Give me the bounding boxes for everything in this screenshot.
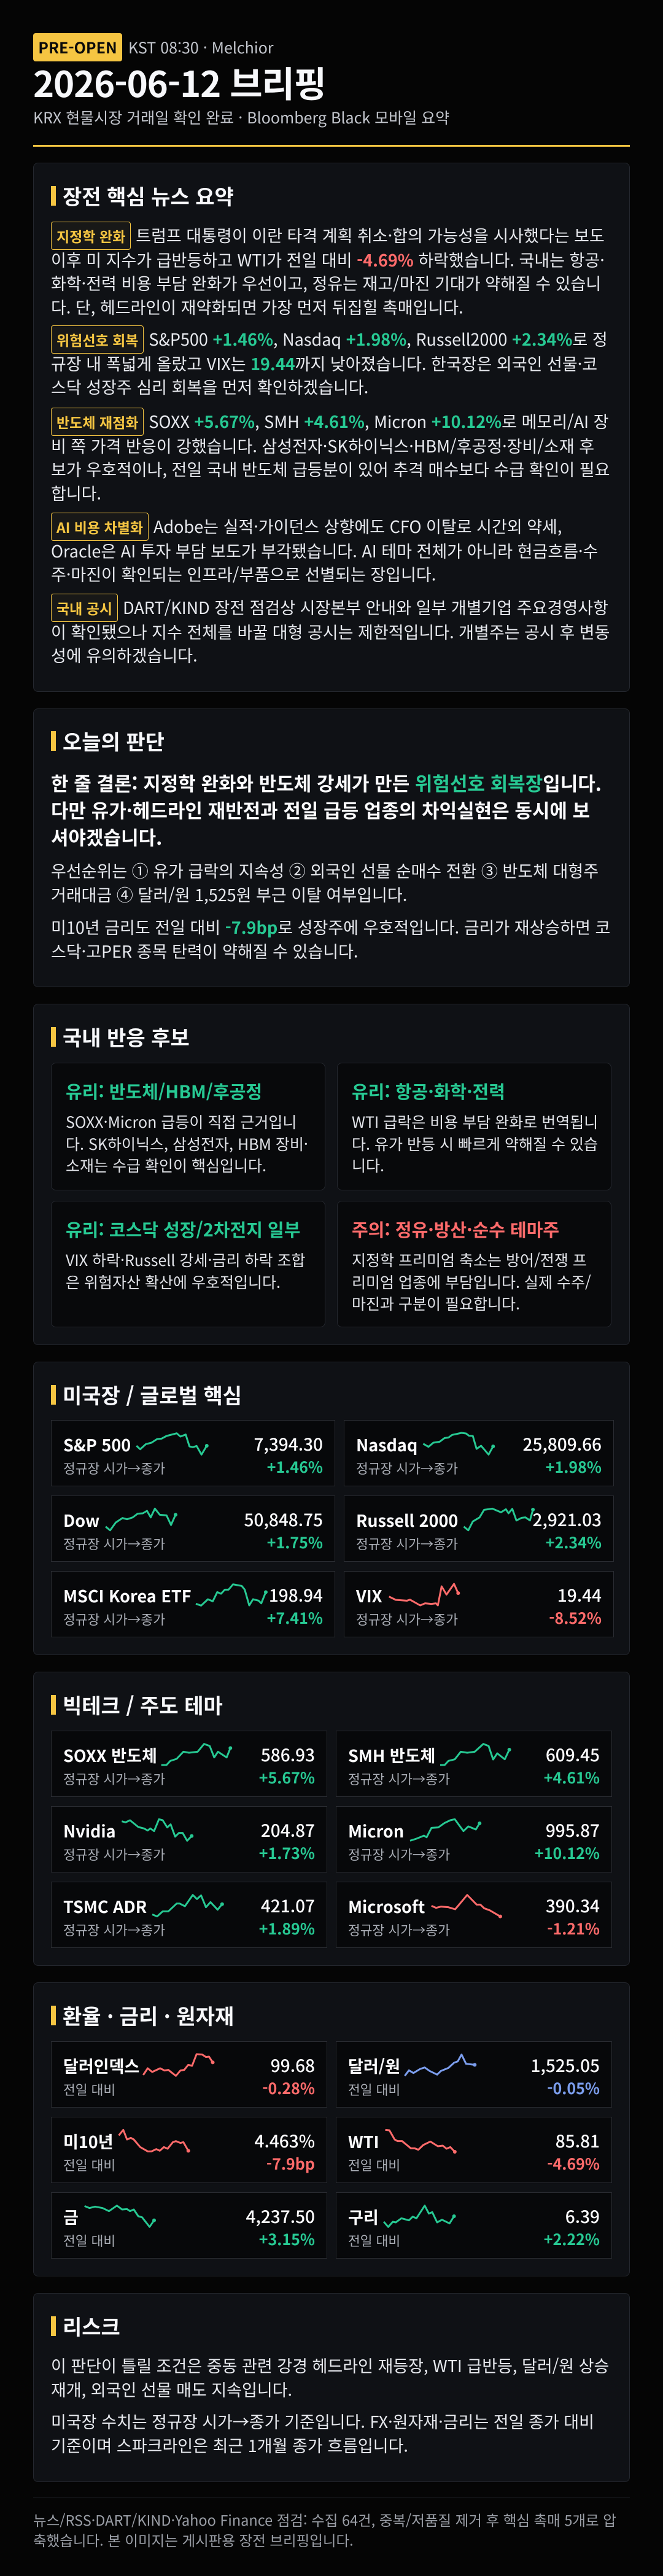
footer note [33, 2509, 616, 2550]
card: VIX: 정규장 시가→종가 [356, 1610, 458, 1629]
news item: AI cost: Oracle은 AI 투자 부담 보도가 부각됐습니다. AI 테마 전체가 아니라 현금흐름·수 [51, 538, 598, 562]
card: SMH: +4.61% [544, 1766, 600, 1788]
card: copper: 구리 [348, 2205, 379, 2229]
card: S&P 500: 7,394.30 [254, 1432, 323, 1456]
card: SMH: SMH 반도체 [348, 1743, 435, 1767]
rates paragraph: 스닥·고PER 종목 탄력이 약해질 수 있습니다. [51, 939, 358, 963]
sparkline [105, 1508, 177, 1531]
card: airlines, chemicals, power [337, 1063, 611, 1190]
card: USD/KRW: 달러/원 [348, 2054, 400, 2077]
card: Nasdaq [344, 1420, 614, 1486]
sparkline [161, 1743, 232, 1766]
sparkline [404, 2054, 476, 2076]
panel: US and global [33, 1362, 630, 1655]
card text: SOXX·Micron 급등이 직접 근거입니 [66, 1111, 297, 1133]
card: Nasdaq: +1.98% [546, 1456, 602, 1478]
panel: big tech and themes [33, 1672, 630, 1966]
card: Nvidia: 정규장 시가→종가 [63, 1845, 165, 1864]
heading: US and global: 미국장 / 글로벌 핵심 [63, 1379, 242, 1410]
one-line conclusion: 다만 유가·헤드라인 재반전과 전일 급등 업종의 차익실현은 동시에 보 [51, 796, 590, 823]
card: SMH: 정규장 시가→종가 [348, 1769, 450, 1788]
risk text: 이 판단이 틀릴 조건은 중동 관련 강경 헤드라인 재등장, WTI 급반등, 달러/원 상승 [51, 2353, 609, 2377]
card text: 다. 유가 반등 시 빠르게 약해질 수 있습 [352, 1132, 598, 1154]
card: caution [337, 1201, 611, 1327]
header badge: PRE-OPEN [33, 33, 122, 61]
card title: 유리: 코스닥 성장/2차전지 일부 [66, 1216, 300, 1242]
card text: VIX 하락·Russell 강세·금리 하락 조합 [66, 1249, 305, 1271]
card: VIX: 19.44 [557, 1583, 602, 1607]
sparkline [152, 1894, 224, 1918]
panel: news summary [33, 163, 630, 692]
card: Microsoft: -1.21% [547, 1917, 600, 1939]
title: 2026-06-12 브리핑 [33, 56, 326, 107]
card: WTI [336, 2117, 612, 2183]
card: USD/KRW: 1,525.05 [530, 2053, 600, 2077]
card text: 지정학 프리미엄 축소는 방어/전쟁 프 [352, 1249, 587, 1271]
card: Dow: Dow [63, 1508, 99, 1532]
card: TSMC ADR [51, 1882, 327, 1948]
card: MSCI Korea ETF: 198.94 [269, 1583, 323, 1607]
news item: geopolitics: 지정학 완화 트럼프 대통령이 이란 타격 계획 취소·합의 가능성을 시사했다는 보도 [56, 223, 605, 247]
news item: semiconductors: 합니다. [51, 481, 101, 505]
news item: AI cost: 주·마진이 확인되는 인프라/부품으로 선별되는 장입니다. [51, 562, 436, 586]
card: USD/KRW [336, 2041, 612, 2108]
news item: domestic filings [51, 594, 610, 667]
heading: today's judgement: 오늘의 판단 [63, 726, 165, 756]
card: TSMC ADR: 421.07 [261, 1893, 315, 1918]
card: gold: 금 [63, 2205, 79, 2229]
sparkline [195, 1583, 268, 1607]
card: MSCI Korea ETF: MSCI Korea ETF [63, 1583, 192, 1607]
card: SMH [336, 1731, 612, 1797]
card: Dow: 정규장 시가→종가 [63, 1534, 165, 1553]
news item: domestic filings: 이 확인됐으나 지수 전체를 바꿀 대형 공시는 제한적입니다. 개별주는 공시 후 변동 [51, 619, 610, 643]
card: Microsoft: 정규장 시가→종가 [348, 1920, 450, 1939]
news item: geopolitics: 이후 미 지수가 급반등하고 WTI가 전일 대비 -4.69% 하락했습니다. 국내는 항공· [51, 247, 605, 271]
sparkline [385, 2129, 457, 2154]
card: Russell 2000: Russell 2000 [356, 1508, 458, 1532]
heading: big tech: 빅테크 / 주도 테마 [63, 1690, 223, 1720]
card: US 10Y: 4.463% [254, 2128, 315, 2153]
news item: semiconductors [51, 408, 610, 505]
news item: semiconductors: 비 쪽 가격 반응이 강했습니다. 삼성전자·SK하이닉스·HBM/후공정·장비/소재 후 [51, 433, 594, 457]
card text: 니다. [352, 1154, 384, 1176]
news item: AI cost: AI 비용 차별화 Adobe는 실적·가이던스 상향에도 CFO 이탈로 시간외 약세, [56, 514, 562, 538]
card: Nvidia: 204.87 [261, 1818, 315, 1842]
header badge: PRE-OPEN: PRE-OPEN [38, 36, 117, 58]
card: VIX [344, 1571, 614, 1637]
card: copper [336, 2192, 612, 2259]
card: gold: 4,237.50 [246, 2204, 315, 2229]
heading: domestic candidates: 국내 반응 후보 [63, 1022, 190, 1052]
news item: domestic filings: 성에 유의하겠습니다. [51, 643, 198, 667]
card: Microsoft [336, 1882, 612, 1948]
card text: 마진과 구분이 필요합니다. [352, 1292, 520, 1314]
card: SOXX: +5.67% [259, 1766, 315, 1788]
card: gold: 전일 대비 [63, 2231, 115, 2250]
heading: risk: 리스크 [63, 2311, 120, 2341]
card: dollar index: 달러인덱스 [63, 2054, 139, 2077]
card: TSMC ADR: 정규장 시가→종가 [63, 1920, 165, 1939]
card: SMH: 609.45 [546, 1742, 600, 1767]
card: Nvidia: +1.73% [259, 1842, 315, 1864]
panel: risk [33, 2293, 630, 2482]
card: USD/KRW: -0.05% [547, 2077, 600, 2099]
card: Nasdaq: Nasdaq [356, 1432, 417, 1456]
sparkline [136, 1432, 209, 1456]
card: Russell 2000: 2,921.03 [532, 1507, 602, 1532]
card: Micron: 995.87 [546, 1818, 600, 1842]
card: gold: +3.15% [259, 2228, 315, 2250]
sparkline [463, 1508, 535, 1531]
news item: risk appetite: 규장 내 폭넓게 올랐고 VIX는 19.44까지 낮아졌습니다. 한국장은 외국인 선물·코 [51, 351, 597, 375]
news item: geopolitics [51, 222, 605, 319]
card: US 10Y: -7.9bp [266, 2152, 315, 2174]
footer note: 뉴스/RSS·DART/KIND·Yahoo Finance 점검: 수집 64건, 중복/저품질 제거 후 핵심 촉매 5개로 압 [33, 2509, 616, 2530]
card text [352, 1249, 591, 1314]
priority paragraph [51, 858, 599, 906]
card: US 10Y: 미10년 [63, 2129, 114, 2153]
panel: today's judgement [33, 708, 630, 987]
card text [352, 1111, 598, 1176]
header meta: KST 08:30 · Melchior [128, 36, 274, 58]
card: WTI: -4.69% [547, 2152, 600, 2174]
panel: domestic reaction candidates [33, 1004, 630, 1345]
news item: geopolitics: 화학·전력 비용 부담 완화가 우선이고, 정유는 재고/마진 기대가 약해질 수 있습니 [51, 271, 601, 295]
card: Dow: +1.75% [267, 1531, 323, 1553]
card: dollar index: 전일 대비 [63, 2080, 115, 2099]
data basis text: 미국장 수치는 정규장 시가→종가 기준입니다. FX·원자재·금리는 전일 종가 대비 [51, 2409, 594, 2433]
card text: 다. SK하이닉스, 삼성전자, HBM 장비· [66, 1132, 308, 1154]
header rule [33, 145, 630, 147]
footer note: 축했습니다. 본 이미지는 게시판용 장전 브리핑입니다. [33, 2529, 354, 2550]
card: WTI: WTI [348, 2129, 379, 2153]
card: Micron [336, 1806, 612, 1872]
news item: risk appetite: 스닥 성장주 심리 회복을 먼저 확인하겠습니다. [51, 374, 368, 398]
card: S&P 500: +1.46% [267, 1456, 323, 1478]
news item: risk appetite: 위험선호 회복 S&P500 +1.46%, Nasdaq +1.98%, Russell2000 +2.34%로 정 [56, 327, 608, 351]
card text: 소재는 수급 확인이 핵심입니다. [66, 1154, 266, 1176]
card: TSMC ADR: TSMC ADR [63, 1894, 147, 1918]
card: MSCI Korea ETF [51, 1571, 335, 1637]
card: Russell 2000 [344, 1496, 614, 1562]
card text: 리미엄 업종에 부담입니다. 실제 수주/ [352, 1271, 591, 1293]
rates paragraph: 미10년 금리도 전일 대비 -7.9bp로 성장주에 우호적입니다. 금리가 재상승하면 코 [51, 915, 610, 939]
rates paragraph [51, 915, 610, 963]
card: USD/KRW: 전일 대비 [348, 2080, 400, 2099]
news item: semiconductors: 반도체 재점화 SOXX +5.67%, SMH +4.61%, Micron +10.12%로 메모리/AI 장 [56, 409, 608, 433]
heading: FX, rates, commodities: 환율 · 금리 · 원자재 [63, 2000, 234, 2030]
card: KOSDAQ growth [51, 1201, 325, 1327]
card: Nvidia: Nvidia [63, 1818, 116, 1842]
card title: 유리: 항공·화학·전력 [352, 1078, 505, 1104]
data basis text [51, 2409, 594, 2457]
card: Nvidia [51, 1806, 327, 1872]
card: US 10Y [51, 2117, 327, 2183]
card: Russell 2000: +2.34% [546, 1531, 602, 1553]
card: Nasdaq: 정규장 시가→종가 [356, 1459, 458, 1478]
card: Nasdaq: 25,809.66 [523, 1432, 602, 1456]
card: VIX: VIX [356, 1583, 382, 1607]
card: Microsoft: 390.34 [546, 1893, 600, 1918]
card text: WTI 급락은 비용 부담 완화로 번역됩니 [352, 1111, 598, 1133]
card text [66, 1111, 308, 1176]
sparkline [422, 1432, 495, 1456]
one-line conclusion [51, 769, 602, 850]
one-line conclusion: 한 줄 결론: 지정학 완화와 반도체 강세가 만든 위험선호 회복장입니다. [51, 769, 602, 796]
card: Dow [51, 1496, 335, 1562]
card: Dow: 50,848.75 [244, 1507, 323, 1532]
sparkline [122, 1818, 194, 1842]
sparkline [118, 2129, 190, 2152]
card: US 10Y: 전일 대비 [63, 2155, 115, 2174]
card: VIX: -8.52% [549, 1607, 602, 1629]
card: dollar index: -0.28% [262, 2077, 315, 2099]
card: MSCI Korea ETF: 정규장 시가→종가 [63, 1610, 165, 1629]
news item: domestic filings: 국내 공시 DART/KIND 장전 점검상 시장본부 안내와 일부 개별기업 주요경영사항 [56, 595, 608, 619]
one-line conclusion: 셔야겠습니다. [51, 823, 162, 850]
card title: 주의: 정유·방산·순수 테마주 [352, 1216, 559, 1242]
sparkline [389, 1583, 460, 1607]
panel: FX, rates, commodities [33, 1982, 630, 2276]
card: MSCI Korea ETF: +7.41% [267, 1607, 323, 1629]
card: WTI: 85.81 [556, 2128, 600, 2153]
card: SOXX: 586.93 [261, 1742, 315, 1767]
card: WTI: 전일 대비 [348, 2155, 400, 2174]
card: copper: +2.22% [544, 2228, 600, 2250]
card: Micron: +10.12% [535, 1842, 600, 1864]
card: gold [51, 2192, 327, 2259]
card text: 은 위험자산 확산에 우호적입니다. [66, 1271, 281, 1293]
card: Microsoft: Microsoft [348, 1894, 425, 1918]
card: S&P 500: S&P 500 [63, 1432, 131, 1456]
sparkline [84, 2205, 156, 2228]
card: copper: 6.39 [565, 2204, 600, 2229]
card: SOXX: 정규장 시가→종가 [63, 1769, 165, 1788]
news item: semiconductors: 보가 우호적이나, 전일 국내 반도체 급등분이 있어 추격 매수보다 수급 확인이 필요 [51, 457, 610, 481]
card: SOXX: SOXX 반도체 [63, 1743, 157, 1767]
sparkline [431, 1894, 502, 1918]
news item: risk appetite [51, 325, 608, 398]
data basis text: 기준이며 스파크라인은 최근 1개월 종가 흐름입니다. [51, 2433, 408, 2457]
card: S&P 500 [51, 1420, 335, 1486]
card: copper: 전일 대비 [348, 2231, 400, 2250]
news item: AI cost [51, 513, 598, 586]
priority paragraph: 우선순위는 ① 유가 급락의 지속성 ② 외국인 선물 순매수 전환 ③ 반도체 대형주 [51, 858, 599, 882]
subtitle: KRX 현물시장 거래일 확인 완료 · Bloomberg Black 모바일 요약 [33, 106, 449, 128]
card: dollar index [51, 2041, 327, 2108]
priority paragraph: 거래대금 ④ 달러/원 1,525원 부근 이탈 여부입니다. [51, 882, 407, 906]
sparkline [410, 1818, 481, 1842]
heading: news summary: 장전 핵심 뉴스 요약 [63, 180, 234, 211]
sparkline [383, 2205, 456, 2228]
card: dollar index: 99.68 [271, 2053, 315, 2077]
news item: geopolitics: 다. 단, 헤드라인이 재약화되면 가장 먼저 뒤집힐 촉매입니다. [51, 295, 463, 319]
card: Russell 2000: 정규장 시가→종가 [356, 1534, 458, 1553]
card text [66, 1249, 305, 1293]
card: semiconductors [51, 1063, 325, 1190]
sparkline [142, 2053, 215, 2077]
card title: 유리: 반도체/HBM/후공정 [66, 1078, 262, 1104]
card: S&P 500: 정규장 시가→종가 [63, 1459, 165, 1478]
risk text [51, 2353, 609, 2401]
card: TSMC ADR: +1.89% [259, 1917, 315, 1939]
risk text: 재개, 외국인 선물 매도 지속입니다. [51, 2377, 292, 2401]
sparkline [440, 1743, 511, 1766]
card: SOXX [51, 1731, 327, 1797]
card: Micron: Micron [348, 1818, 404, 1842]
card: Micron: 정규장 시가→종가 [348, 1845, 450, 1864]
